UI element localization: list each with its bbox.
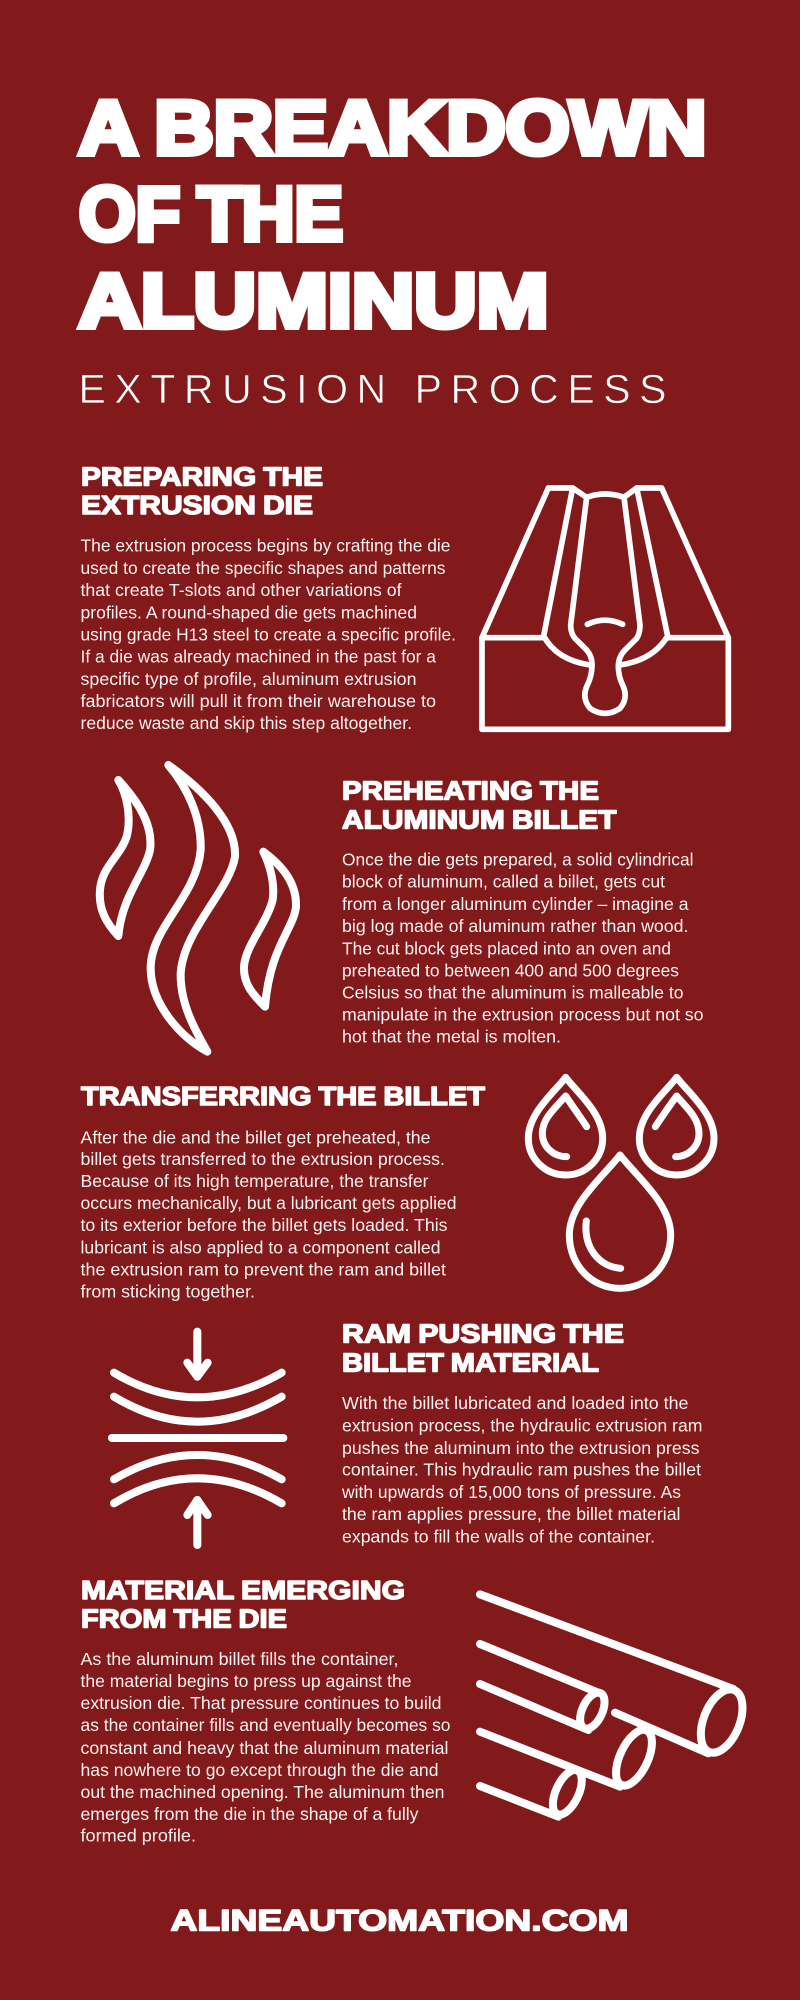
text block: preparing the extrusion die: specific type of profile, aluminum extrusion bbox=[80, 669, 416, 689]
text block: material emerging from the die: has nowhere to go except through the die and bbox=[80, 1760, 438, 1780]
text block: material emerging from the die: constant and heavy that the aluminum material bbox=[80, 1738, 448, 1758]
heading: material emerging from the die bbox=[81, 1577, 405, 1634]
text block: material emerging from the die: the material begins to press up against the bbox=[80, 1671, 412, 1691]
heading: preparing the extrusion die: PREPARING THE bbox=[81, 464, 323, 492]
text block: preheating the aluminum billet: block of aluminum, called a billet, gets cut bbox=[342, 872, 665, 892]
text block: ram pushing the billet material: With the billet lubricated and loaded into the bbox=[342, 1393, 688, 1413]
panel: preparing the extrusion die bbox=[80, 464, 728, 733]
heading: preheating the aluminum billet bbox=[342, 777, 617, 834]
icon: extruded tubes bbox=[480, 1594, 751, 1819]
text block: preheating the aluminum billet: hot that the metal is molten. bbox=[342, 1027, 561, 1047]
footer: website: ALINEAUTOMATION.COM bbox=[170, 1904, 628, 1938]
text block: preheating the aluminum billet: big log made of aluminum rather than wood. bbox=[342, 916, 688, 936]
text block: transferring the billet: the extrusion ram to prevent the ram and billet bbox=[80, 1260, 446, 1280]
text block: transferring the billet: lubricant is also applied to a component called bbox=[80, 1237, 440, 1257]
subtitle: EXTRUSION PROCESS bbox=[78, 366, 666, 412]
text block: preparing the extrusion die bbox=[80, 536, 456, 733]
text block: material emerging from the die: as the container fills and eventually becomes so bbox=[80, 1715, 450, 1735]
text block: preheating the aluminum billet: Celsius so that the aluminum is malleable to bbox=[342, 982, 684, 1002]
text block: preparing the extrusion die: used to create the specific shapes and patterns bbox=[80, 558, 446, 578]
text block: preparing the extrusion die: fabricators will pull it from their warehouse to bbox=[80, 691, 436, 711]
text block: transferring the billet: billet gets transferred to the extrusion process. bbox=[80, 1149, 445, 1169]
text block: transferring the billet: from sticking together. bbox=[80, 1282, 255, 1302]
text block: ram pushing the billet material: extrusion process, the hydraulic extrusion ram bbox=[342, 1416, 702, 1436]
text block: transferring the billet: Because of its high temperature, the transfer bbox=[80, 1171, 429, 1191]
heading: material emerging from the die: FROM THE DIE bbox=[81, 1606, 287, 1634]
text block: ram pushing the billet material bbox=[341, 1393, 702, 1547]
text block: preheating the aluminum billet: preheated to between 400 and 500 degrees bbox=[342, 960, 679, 980]
text block: ram pushing the billet material: expands to fill the walls of the container. bbox=[342, 1527, 655, 1547]
text block: preheating the aluminum billet: manipulate in the extrusion process but not so bbox=[342, 1005, 704, 1025]
text block: preheating the aluminum billet bbox=[342, 849, 704, 1047]
text block: preparing the extrusion die: using grade H13 steel to create a specific profile. bbox=[80, 625, 456, 645]
text block: transferring the billet bbox=[80, 1127, 457, 1302]
text block: ram pushing the billet material: pushes the aluminum into the extrusion press bbox=[342, 1438, 700, 1458]
title: OF THE bbox=[79, 172, 343, 257]
text block: ram pushing the billet material: container. This hydraulic ram pushes the billet bbox=[342, 1460, 701, 1480]
text block: preparing the extrusion die: profiles. A round-shaped die gets machined bbox=[80, 602, 417, 622]
text block: preparing the extrusion die: reduce waste and skip this step altogether. bbox=[80, 713, 412, 733]
heading: preparing the extrusion die bbox=[81, 464, 323, 520]
text block: preheating the aluminum billet: from a longer aluminum cylinder – imagine a bbox=[342, 894, 689, 914]
text block: preparing the extrusion die: that create T-slots and other variations of bbox=[80, 580, 402, 600]
panel: preheating the aluminum billet bbox=[100, 765, 703, 1052]
title: A BREAKDOWN bbox=[78, 86, 706, 171]
icon: lubricant drops bbox=[528, 1077, 714, 1288]
panel: transferring the billet bbox=[80, 1077, 714, 1302]
text block: preheating the aluminum billet: The cut block gets placed into an oven and bbox=[342, 938, 671, 958]
heading: preheating the aluminum billet: ALUMINUM BILLET bbox=[342, 806, 617, 834]
text block: ram pushing the billet material: with upwards of 15,000 tons of pressure. As bbox=[341, 1482, 681, 1502]
heading: material emerging from the die: MATERIAL EMERGING bbox=[81, 1577, 405, 1605]
text block: material emerging from the die: As the aluminum billet fills the container, bbox=[80, 1649, 398, 1669]
text block: transferring the billet: to its exterior before the billet gets loaded. This bbox=[80, 1215, 448, 1235]
heading: ram pushing the billet material: BILLET MATERIAL bbox=[342, 1350, 599, 1378]
heading: ram pushing the billet material bbox=[342, 1321, 624, 1378]
panel: ram pushing the billet material bbox=[112, 1321, 703, 1547]
text block: preheating the aluminum billet: Once the die gets prepared, a solid cylindrical bbox=[342, 849, 694, 869]
text block: material emerging from the die: formed profile. bbox=[80, 1826, 196, 1846]
heading: ram pushing the billet material: RAM PUSHING THE bbox=[342, 1321, 624, 1349]
icon: extrusion die bbox=[482, 488, 728, 729]
text block: preparing the extrusion die: If a die was already machined in the past for a bbox=[80, 647, 436, 667]
heading: preheating the aluminum billet: PREHEATING THE bbox=[342, 777, 599, 805]
title: ALUMINUM bbox=[78, 259, 548, 344]
title bbox=[78, 86, 706, 344]
text block: material emerging from the die bbox=[80, 1649, 450, 1846]
text block: transferring the billet: occurs mechanically, but a lubricant gets applied bbox=[80, 1193, 457, 1213]
text block: material emerging from the die: out the machined opening. The aluminum then bbox=[80, 1782, 444, 1802]
heading: transferring the billet: TRANSFERRING THE BILLET bbox=[81, 1083, 485, 1111]
heading: preparing the extrusion die: EXTRUSION DIE bbox=[81, 492, 313, 520]
panel: material emerging from the die bbox=[80, 1577, 751, 1846]
icon: heat flames bbox=[100, 765, 296, 1052]
text block: ram pushing the billet material: the ram applies pressure, the billet material bbox=[342, 1504, 680, 1524]
text block: preparing the extrusion die: The extrusion process begins by crafting the die bbox=[80, 536, 450, 556]
text block: material emerging from the die: emerges from the die in the shape of a fully bbox=[80, 1804, 419, 1824]
icon: compression arrows bbox=[112, 1332, 283, 1545]
text block: transferring the billet: After the die and the billet get preheated, the bbox=[80, 1127, 430, 1147]
text block: material emerging from the die: extrusion die. That pressure continues to build bbox=[80, 1693, 442, 1713]
